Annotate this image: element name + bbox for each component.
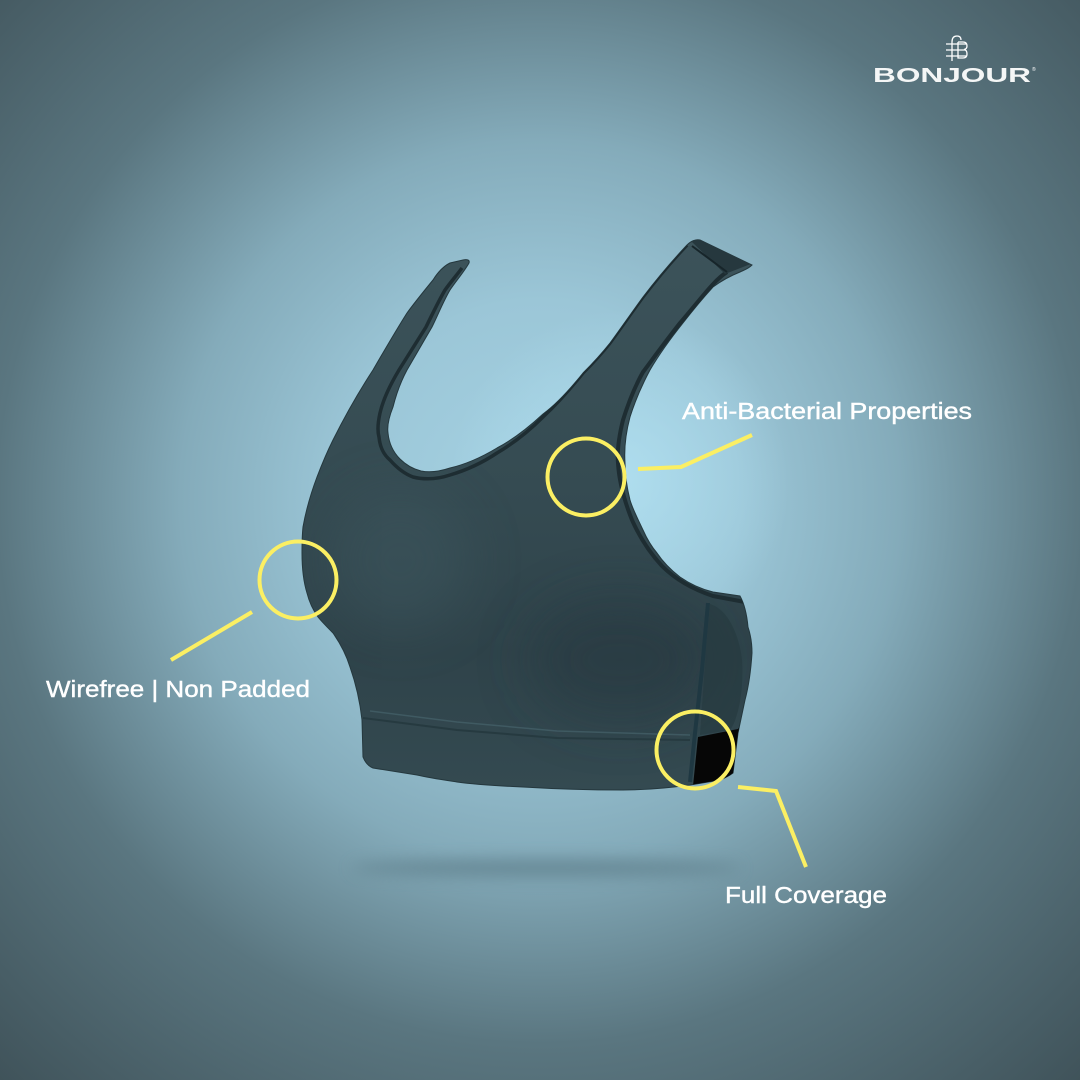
leader line: full coverage	[738, 787, 806, 867]
wordmark: BONJOUR	[873, 65, 1032, 87]
label: anti-bacterial: Anti-Bacterial Properties	[682, 398, 972, 424]
callout ring: wirefree	[260, 542, 336, 618]
registered mark: ®	[1032, 66, 1036, 73]
label: wirefree: Wirefree | Non Padded	[46, 676, 310, 702]
icon: logo monogram	[946, 36, 967, 61]
leader line: wirefree	[171, 612, 252, 660]
product shadow	[351, 859, 741, 877]
logo: Bonjour	[873, 36, 1036, 87]
product: sports bra	[302, 232, 756, 790]
callout ring: full coverage	[656, 712, 734, 788]
callout ring: anti-bacterial	[548, 438, 624, 516]
light spot	[440, 300, 800, 660]
leader line: anti-bacterial	[638, 435, 752, 469]
label: full coverage: Full Coverage	[725, 882, 887, 908]
